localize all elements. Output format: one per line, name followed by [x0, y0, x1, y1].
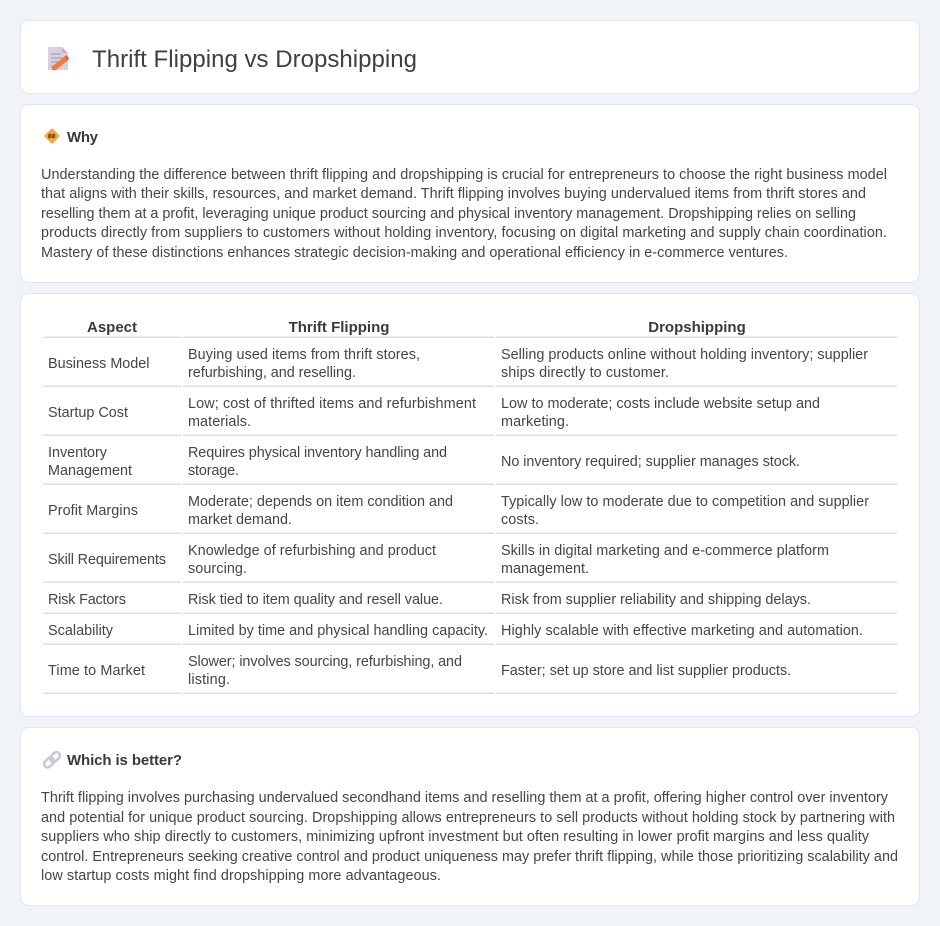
text block: which is better explanation: Thrift flipping involves purchasing undervalued secondhand items and reselling them at a profit, offering higher control over inventory: [41, 790, 889, 806]
text block: why explanation: that aligns with their skills, resources, and market demand. Thrift flipping involves buying undervalued items from thrift stores and: [41, 186, 866, 202]
table row: profit margins: Typically low to moderate due to competition and supplier: [501, 494, 869, 510]
table row: business model: Buying used items from thrift stores,: [188, 347, 420, 363]
table row: risk factors: [43, 592, 897, 614]
table row: skill requirements: [43, 543, 897, 583]
text block: why explanation: Mastery of these distinctions enhances strategic decision-making and operational efficiency in e-commerce ventures.: [41, 245, 788, 261]
table row: profit margins: market demand.: [188, 512, 292, 528]
table row: inventory management: No inventory required; supplier manages stock.: [501, 454, 800, 470]
panel: which is better: [20, 728, 920, 906]
table row: time to market: Slower; involves sourcing, refurbishing, and: [188, 654, 462, 670]
table row: startup cost: Startup Cost: [48, 405, 128, 421]
table row: scalability: Limited by time and physical handling capacity.: [188, 623, 488, 639]
table row: startup cost: Low; cost of thrifted items and refurbishment: [188, 396, 476, 412]
panel: title header: [20, 20, 920, 94]
table header row: Thrift Flipping: [289, 319, 389, 336]
table row: business model: [43, 347, 897, 387]
text block: why explanation: [41, 167, 887, 261]
text block: which is better explanation: control. Entrepreneurs seeking creative control and product uniqueness may prefer thrift flipping, while those prioritizing scalability and: [41, 849, 898, 865]
table row: skill requirements: management.: [501, 561, 589, 577]
table row: inventory management: [43, 445, 897, 485]
text block: which is better explanation: low startup costs might find dropshipping more advantageous.: [41, 868, 441, 884]
table header row: [43, 319, 897, 338]
table row: startup cost: marketing.: [501, 414, 569, 430]
title: Thrift Flipping vs Dropshipping: [92, 46, 417, 73]
heading: why: Why: [67, 129, 99, 146]
text block: why explanation: reselling them at a profit, leveraging unique product sourcing and physical inventory management. Dropshipping relies on selling: [41, 206, 856, 222]
icon: chain link: [43, 751, 61, 769]
panel: why: [20, 104, 920, 282]
table row: inventory management: Inventory: [48, 445, 108, 461]
text block: which is better explanation: suppliers who ship directly to customers, minimizing upfront investment but often resulting in lower profit margins and less quality: [41, 829, 870, 845]
table header row: Aspect: [87, 319, 137, 336]
table row: profit margins: costs.: [501, 512, 539, 528]
table row: inventory management: Requires physical inventory handling and: [188, 445, 447, 461]
text block: why explanation: products directly from suppliers to customers without holding inventory, focusing on digital marketing and supply chain coordination.: [41, 225, 887, 241]
table row: profit margins: [43, 494, 897, 534]
table row: time to market: Faster; set up store and list supplier products.: [501, 663, 791, 679]
text block: which is better explanation: [41, 790, 898, 884]
table row: startup cost: materials.: [188, 414, 251, 430]
table row: business model: Selling products online without holding inventory; supplier: [501, 347, 868, 363]
table row: profit margins: Profit Margins: [48, 503, 138, 519]
table row: time to market: Time to Market: [48, 663, 145, 679]
table row: business model: refurbishing, and reselling.: [188, 365, 356, 381]
table row: startup cost: Low to moderate; costs include website setup and: [501, 396, 820, 412]
table row: profit margins: Moderate; depends on item condition and: [188, 494, 453, 510]
table row: skill requirements: sourcing.: [188, 561, 247, 577]
heading: which is better: Which is better?: [67, 752, 182, 769]
table row: time to market: listing.: [188, 672, 230, 688]
table row: business model: ships directly to customer.: [501, 365, 669, 381]
icon: memo with pencil: [48, 47, 69, 70]
table row: risk factors: Risk tied to item quality and resell value.: [188, 592, 443, 608]
panel: comparison table: [20, 294, 920, 716]
table row: skill requirements: Knowledge of refurbishing and product: [188, 543, 436, 559]
table header row: Dropshipping: [648, 319, 746, 336]
table row: scalability: Scalability: [48, 623, 114, 639]
table row: risk factors: Risk from supplier reliability and shipping delays.: [501, 592, 811, 608]
table row: scalability: [43, 623, 897, 645]
table row: skill requirements: Skill Requirements: [48, 552, 166, 568]
table row: business model: Business Model: [48, 356, 150, 372]
table row: startup cost: [43, 396, 897, 436]
table row: inventory management: Management: [48, 463, 132, 479]
table row: skill requirements: Skills in digital marketing and e-commerce platform: [501, 543, 829, 559]
table row: risk factors: Risk Factors: [48, 592, 126, 608]
table row: inventory management: storage.: [188, 463, 239, 479]
icon: orange diamond sign: [44, 128, 60, 144]
text block: which is better explanation: and potential for unique product sourcing. Dropshipping allows entrepreneurs to sell products without holding stock by partnering with: [41, 810, 895, 826]
text block: why explanation: Understanding the difference between thrift flipping and dropshipping is crucial for entrepreneurs to choose the right business model: [41, 167, 887, 183]
table row: time to market: [43, 654, 897, 694]
table row: scalability: Highly scalable with effective marketing and automation.: [501, 623, 863, 639]
